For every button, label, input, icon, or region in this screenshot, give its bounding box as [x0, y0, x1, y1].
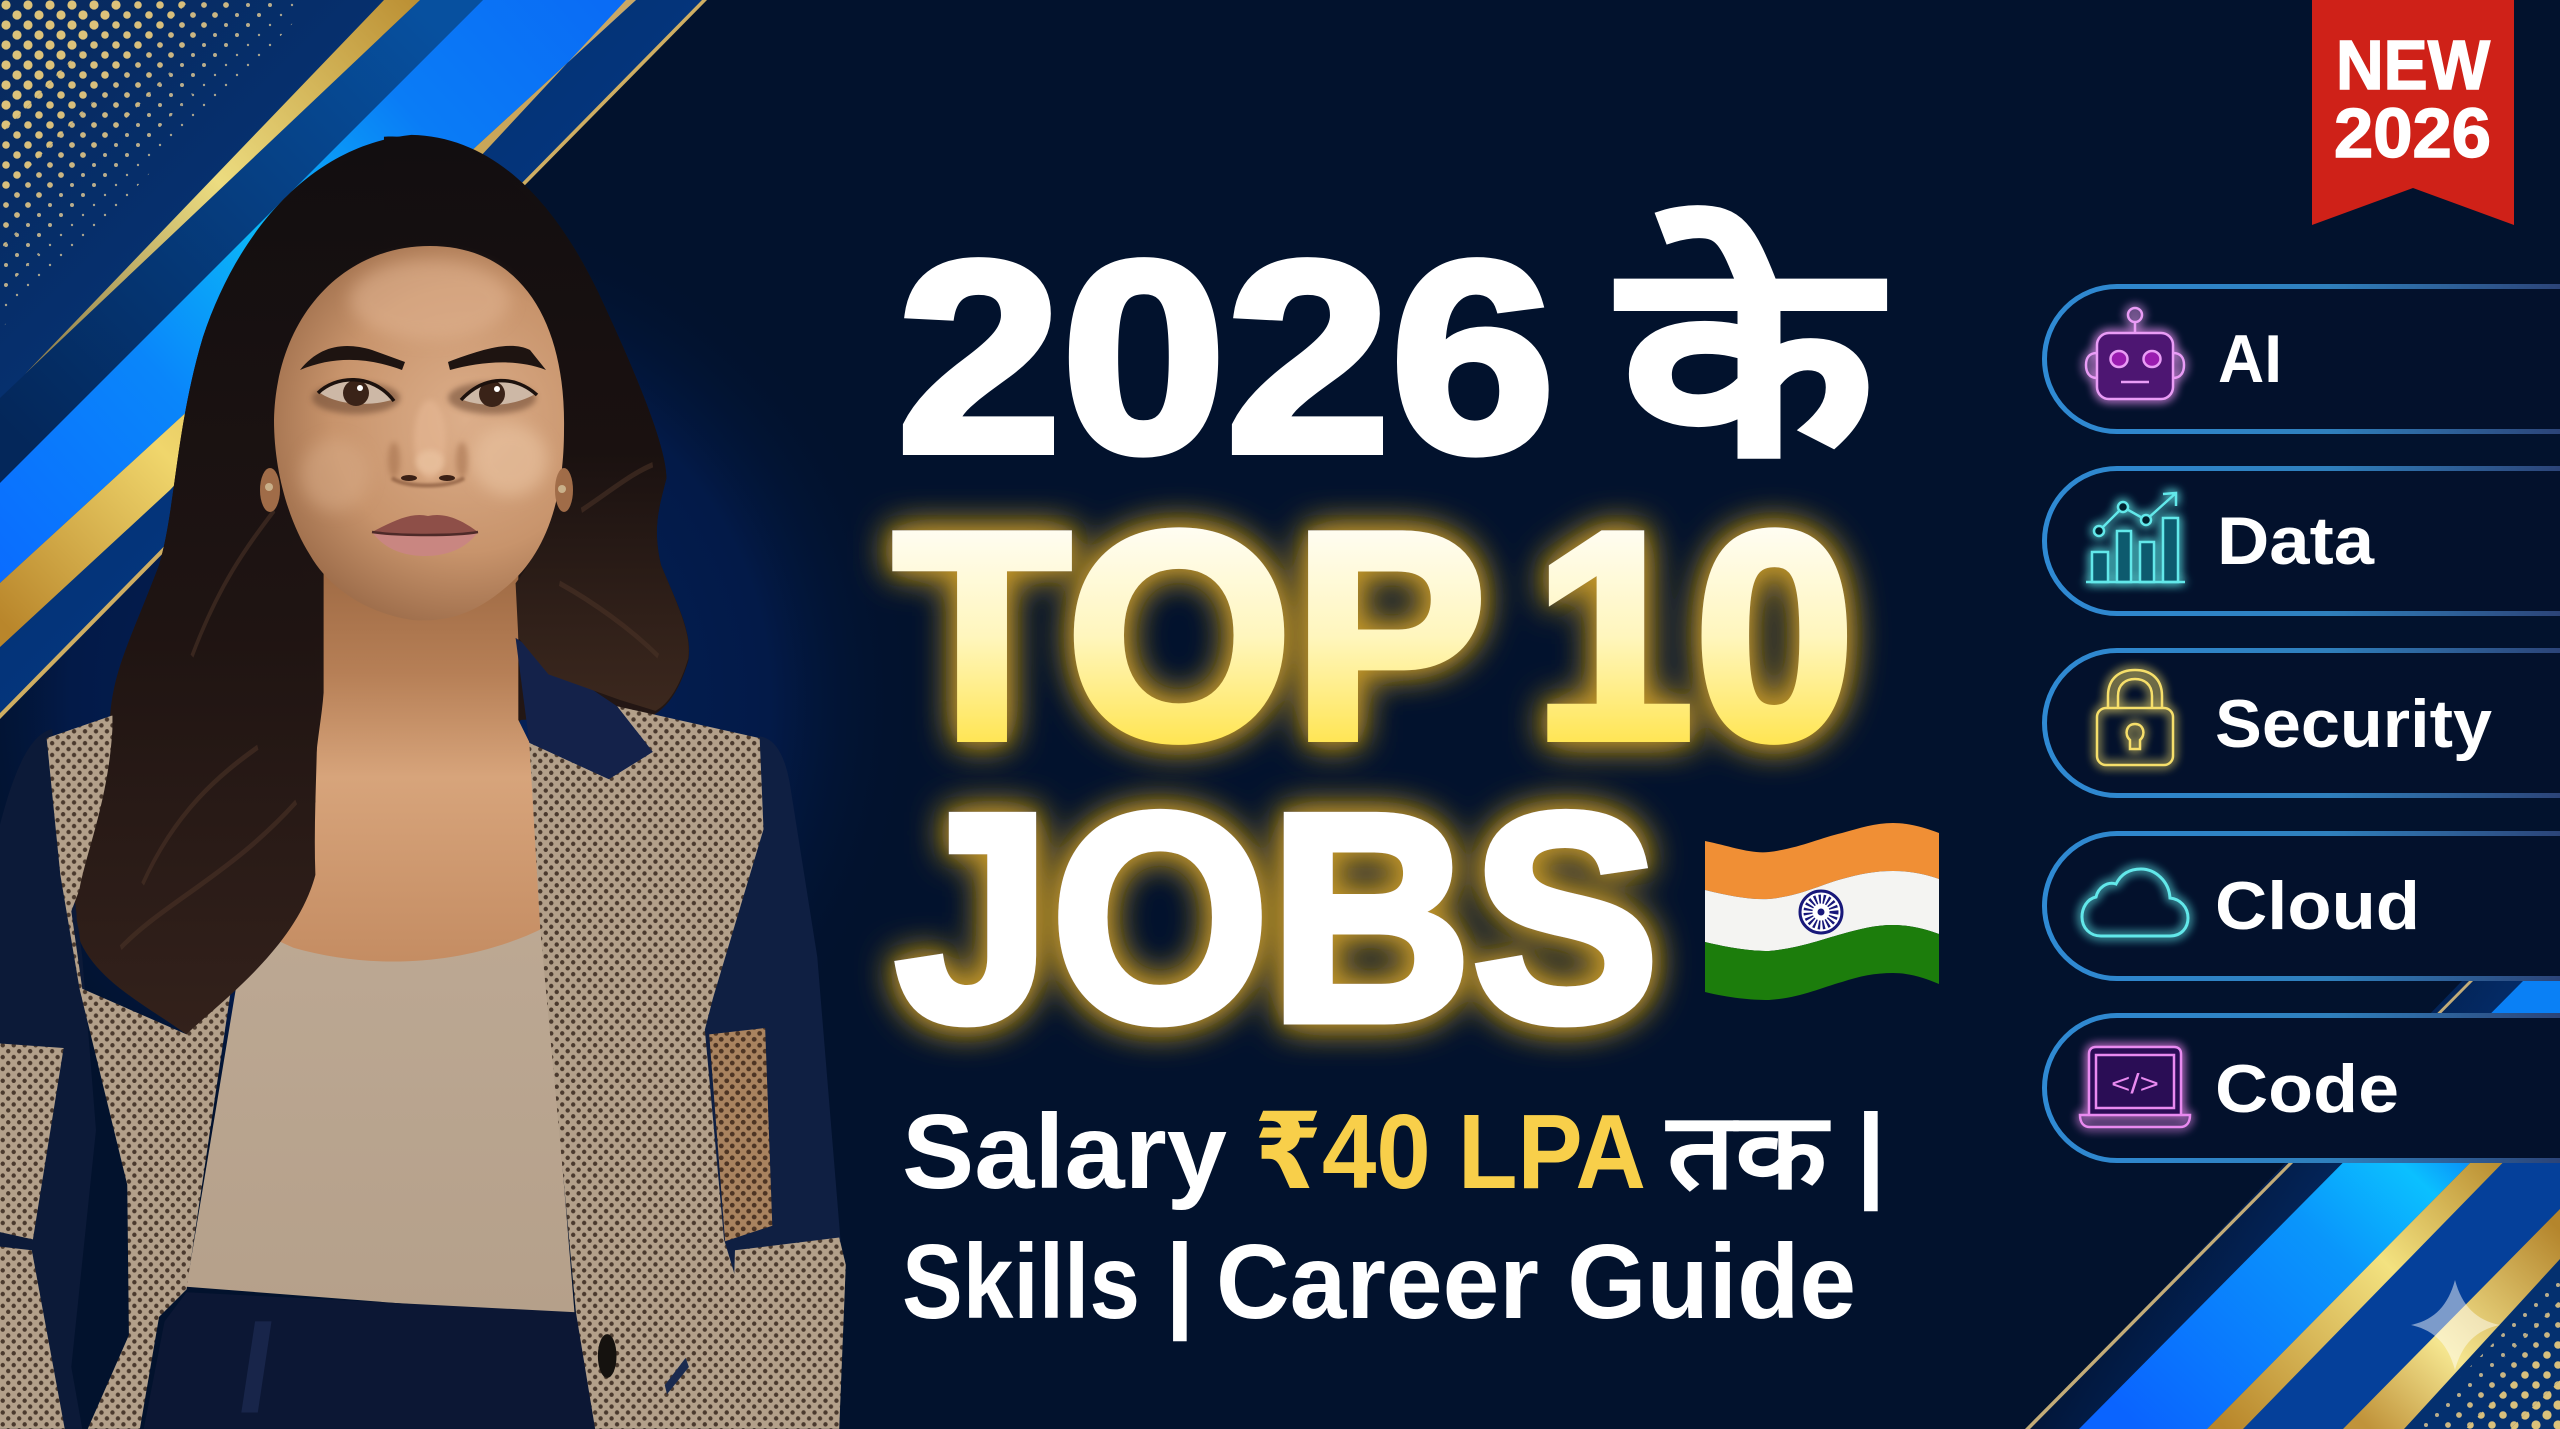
icon: robot: [2086, 308, 2184, 399]
hair highlights: [121, 465, 658, 948]
right sleeve navy: [683, 736, 842, 1403]
pill: Data: Data: [2217, 503, 2375, 579]
subtitle line 1: तक: [1665, 1093, 1831, 1211]
portrait of woman in blazer: [0, 135, 846, 1429]
belt loop: [241, 1321, 272, 1413]
pill: AI: [2044, 286, 2560, 432]
halftone dots top-left: [0, 0, 315, 330]
icon: padlock: [2097, 670, 2173, 765]
subtitle line 1: ₹40 LPA: [1254, 1093, 1646, 1211]
left lower sleeve: [0, 1247, 65, 1429]
background glow behind portrait: [0, 100, 930, 1429]
earrings: [265, 483, 566, 493]
subtitle line 2: [902, 1223, 1856, 1342]
button: [598, 1334, 617, 1378]
icon: laptop with code: [2080, 1047, 2190, 1127]
blazer left shoulder and lapel: [47, 715, 233, 1429]
blazer left sleeve: [0, 729, 96, 1429]
headline line 2: TOP 10: TOP: [893, 470, 1487, 801]
left sleeve patch: [0, 1043, 64, 1239]
subtitle line 2: Career Guide: [1216, 1223, 1856, 1341]
eyebrows: [300, 346, 546, 370]
lips: [372, 515, 478, 556]
badge: NEW 2026 ribbon: 2026: [2334, 94, 2491, 172]
icon: laptop with code: </>: [2111, 1068, 2159, 1099]
nose: [388, 442, 468, 486]
bottom-right diagonal stripes: [2025, 880, 2560, 1429]
headline line 2: TOP 10: [893, 470, 1855, 801]
badge: NEW 2026 ribbon: NEW: [2336, 26, 2490, 104]
pill: Code: [2044, 1016, 2560, 1160]
right sleeve patch: [709, 1028, 772, 1241]
trousers: [144, 1292, 601, 1429]
icon: cloud: [2082, 869, 2188, 936]
right lower sleeve: [730, 1238, 846, 1429]
hair back: [74, 135, 689, 1034]
blazer right lapel and front: [529, 706, 764, 1429]
pill: Cloud: Cloud: [2215, 868, 2420, 944]
subtitle line 2: |: [1165, 1223, 1195, 1342]
badge: NEW 2026 ribbon: [2312, 0, 2514, 225]
pill: Security: [2044, 650, 2560, 796]
pill: Data: [2044, 468, 2560, 614]
neck and chest: [258, 547, 543, 966]
subtitle line 2: Skills: [902, 1223, 1140, 1341]
subtitle line 1: |: [1856, 1093, 1886, 1212]
front hair right: [384, 136, 689, 711]
headline line 1: 2026 के: [897, 205, 1889, 509]
headline line 1: 2026 के: के: [1617, 205, 1889, 509]
headline line 3: JOBS: JOBS: [895, 752, 1659, 1083]
headline line 1: 2026 के: 2026: [897, 205, 1555, 509]
pill: Security: Security: [2215, 686, 2492, 762]
pill: Cloud: [2044, 834, 2560, 978]
pill: AI: AI: [2218, 321, 2282, 397]
subtitle line 1: Salary: [902, 1093, 1227, 1211]
halftone dots bottom-right: [2410, 1274, 2560, 1429]
pocket detail: [665, 1358, 689, 1394]
tank top: [186, 928, 575, 1317]
eyes: [318, 380, 537, 407]
pill: Code: Code: [2215, 1051, 2399, 1127]
headline line 2: TOP 10: 10: [1533, 470, 1855, 801]
face: [260, 246, 573, 620]
top-left diagonal stripes: [0, 0, 707, 719]
subtitle line 1: [902, 1093, 1886, 1212]
icon: sparkle watermark: [2411, 1280, 2500, 1370]
collar navy: [516, 638, 653, 779]
icon: India flag: [1705, 823, 1939, 1000]
front hair left: [77, 144, 406, 1034]
icon: bar chart with arrow: [2086, 493, 2185, 582]
